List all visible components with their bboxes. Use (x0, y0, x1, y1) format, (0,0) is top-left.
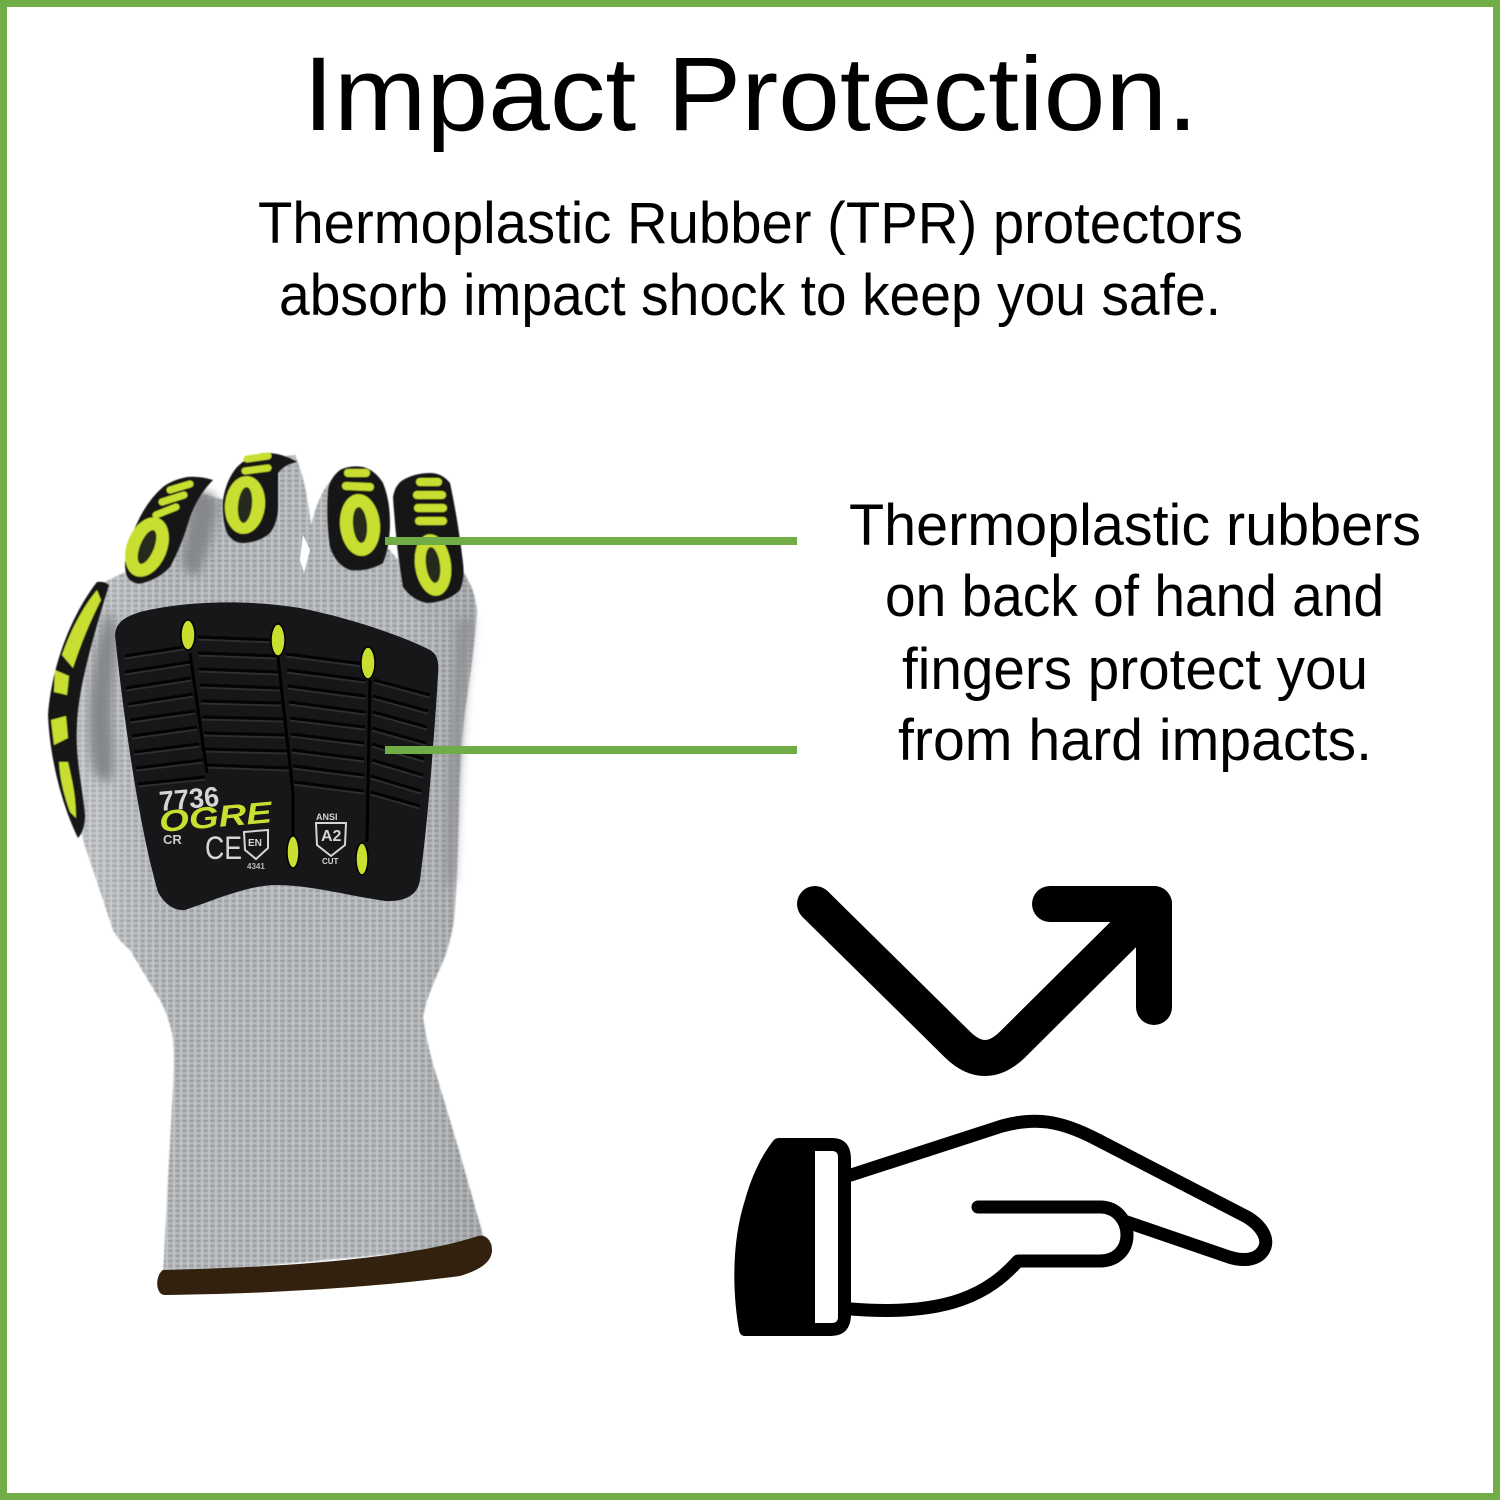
panel ribs (125, 637, 430, 806)
title: Impact Protection. (303, 36, 1198, 153)
glove photo (48, 453, 492, 1295)
panel marking OGRE: OGRE (158, 796, 274, 839)
panel rib highlights (125, 640, 430, 808)
back of hand protector panel (115, 602, 438, 910)
panel marking CR: CR (163, 832, 182, 847)
subtitle: Thermoplastic Rubber (TPR) protectors (258, 191, 1243, 256)
CE mark: CE (205, 830, 242, 866)
ANSI A2 shield icon: A2 (321, 828, 342, 845)
EN shield icon: 4341 (247, 862, 265, 871)
callout text: from hard impacts. (898, 708, 1372, 773)
subtitle (258, 191, 1243, 328)
ANSI A2 shield icon: ANSI (316, 812, 338, 822)
panel marking 7736: 7736 (158, 781, 220, 817)
callout text (849, 493, 1421, 773)
finger protector 3 (327, 466, 390, 570)
glove knit body (50, 455, 492, 1275)
callout text: Thermoplastic rubbers (849, 493, 1421, 558)
panel column grooves (190, 653, 370, 842)
hand cuff (734, 1138, 851, 1336)
EN shield icon (244, 830, 268, 871)
palm coating shading (89, 492, 473, 890)
callout text: fingers protect you (902, 637, 1368, 702)
subtitle: absorb impact shock to keep you safe. (279, 263, 1221, 328)
icon: rebound arrow (815, 904, 1154, 1058)
callout line: fingers (385, 537, 797, 545)
icon: protected hand (734, 1121, 1266, 1336)
callout text: on back of hand and (885, 564, 1384, 629)
ANSI A2 shield icon (316, 812, 346, 866)
callout line: back of hand (385, 746, 797, 754)
hand thumb and palm (851, 1207, 1127, 1311)
EN shield icon: EN (248, 838, 262, 849)
finger protector 2 (222, 453, 297, 543)
knit cuff hem (157, 1236, 492, 1295)
ANSI A2 shield icon: CUT (322, 857, 339, 866)
yellow studs (181, 620, 375, 875)
finger protector 1 (117, 477, 213, 584)
thumb protector (48, 582, 109, 838)
finger protector 4 (393, 473, 464, 603)
hand outline (851, 1121, 1266, 1260)
finger slit (300, 535, 310, 573)
